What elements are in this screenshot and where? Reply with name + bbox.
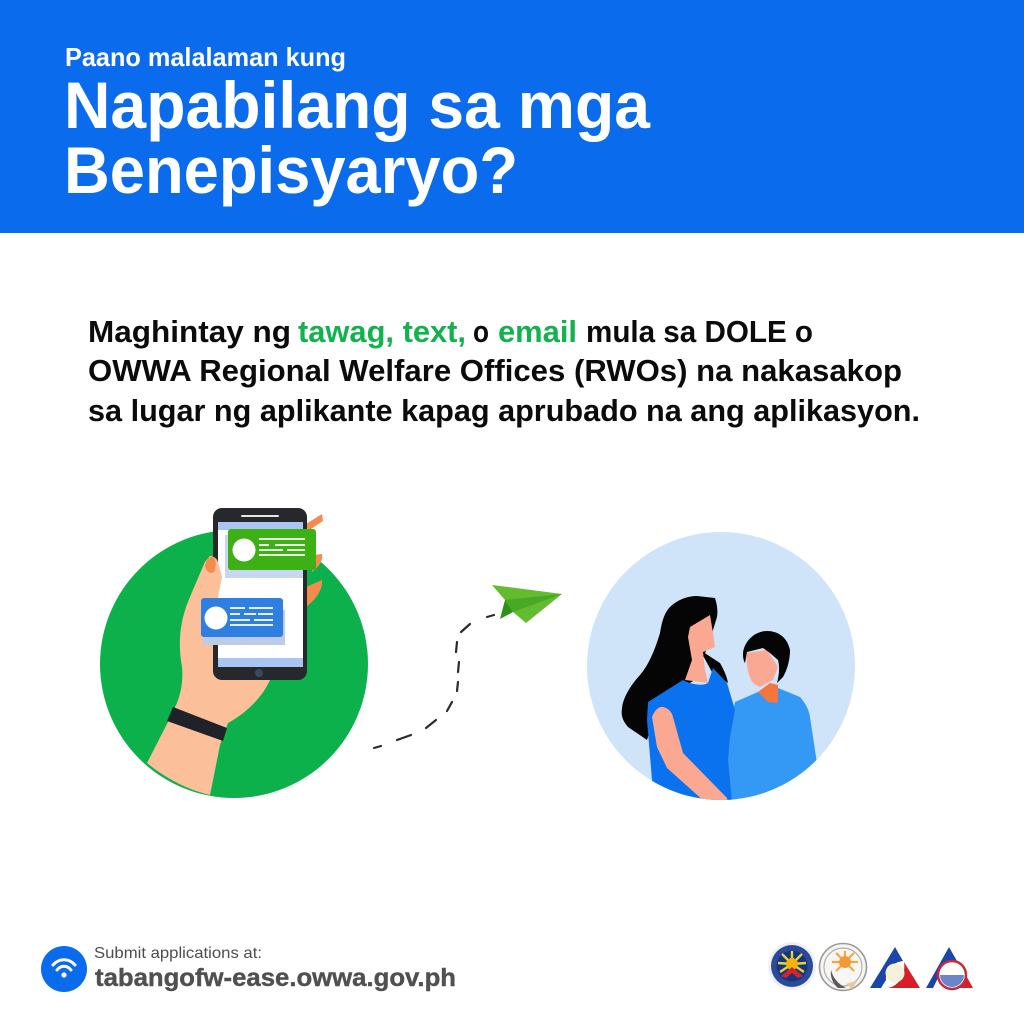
- logo: seal one: [768, 942, 816, 990]
- body text: o: [473, 314, 489, 349]
- boy shirt: [726, 688, 818, 802]
- logo: seal two: [820, 944, 866, 990]
- icon: paper plane: [492, 585, 562, 623]
- body text: tawag, text,: [298, 314, 466, 349]
- illustration: hand holding phone: [100, 508, 368, 798]
- body text: sa lugar ng aplikante kapag aprubado na ang aplikasyon.: [88, 393, 920, 428]
- wristband: [167, 707, 227, 741]
- body text: email: [498, 314, 577, 349]
- body text: [88, 314, 920, 428]
- mother face and neck: [685, 615, 715, 683]
- boy neck: [758, 683, 778, 703]
- body text: Maghintay ng: [88, 314, 291, 349]
- mother arm: [652, 707, 728, 802]
- body text: mula sa DOLE o: [586, 314, 813, 349]
- mother back hair: [704, 653, 728, 683]
- phone: [213, 508, 307, 680]
- boy face: [747, 650, 778, 687]
- website url: tabangofw-ease.owwa.gov.ph: [95, 964, 456, 992]
- thumb nail: [205, 557, 216, 573]
- back fingers: [306, 514, 323, 606]
- blue message bubble: [201, 598, 285, 645]
- mother shirt: [647, 668, 735, 802]
- thumb over phone edge: [190, 556, 222, 620]
- illustration: mother and child: [587, 532, 855, 802]
- title line 1: Napabilang sa mga: [64, 68, 651, 142]
- boy hair: [743, 631, 790, 683]
- logo: triangle two: [926, 947, 973, 989]
- icon: wifi: [41, 946, 87, 992]
- body text: OWWA Regional Welfare Offices (RWOs) na nakasakop: [88, 353, 902, 388]
- hand and arm: [147, 556, 270, 795]
- mother hair: [622, 596, 717, 740]
- green circle: [100, 530, 368, 798]
- pale blue circle: [587, 532, 855, 800]
- footer: submit applications: [41, 945, 456, 992]
- submit label: Submit applications at:: [94, 945, 262, 962]
- green message bubble: [225, 529, 316, 578]
- arrow: dashed flight path: [374, 615, 494, 748]
- logos: [768, 942, 973, 990]
- header band: [0, 0, 1024, 233]
- title line 2: Benepisyaryo?: [64, 133, 518, 207]
- header kicker: Paano malalaman kung: [65, 42, 346, 72]
- logo: triangle one: [870, 947, 920, 988]
